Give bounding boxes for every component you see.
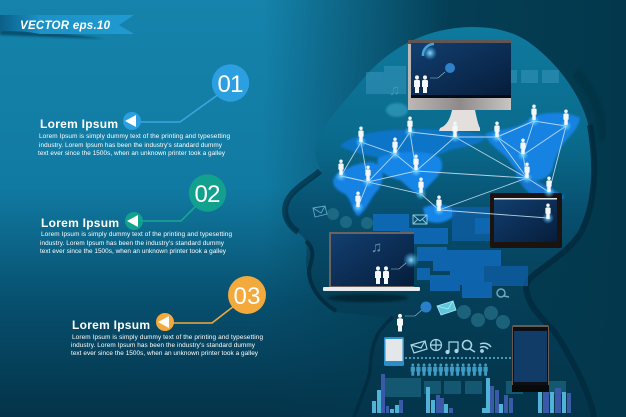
central landmass	[378, 152, 442, 194]
connector line 02	[142, 205, 197, 221]
network links	[341, 121, 566, 218]
node glows	[335, 115, 572, 224]
body text 01: industry. Lorem Ipsum has been the industry's standard dummy	[39, 142, 223, 149]
south-east landmass	[515, 172, 564, 203]
user with link and email	[397, 301, 456, 332]
people row	[411, 363, 488, 376]
step 02	[40, 174, 232, 255]
bar charts	[372, 374, 571, 413]
dotted divider	[405, 357, 511, 359]
glowing dot	[445, 63, 455, 73]
number badge 03	[228, 276, 266, 314]
body text 02: text ever since the 1500s, when an unknown printer took a galley	[40, 248, 227, 255]
hexagon cluster	[327, 208, 510, 329]
west landmass	[333, 162, 383, 216]
south island	[423, 205, 456, 223]
laptop	[323, 232, 420, 302]
right dark contour	[526, 125, 594, 417]
step 01	[38, 64, 249, 157]
world map	[333, 113, 580, 223]
icon row: mail, globe, music, search, wifi	[411, 340, 491, 354]
faint squares behind charts	[384, 378, 566, 397]
step 03	[71, 276, 266, 357]
network people	[335, 104, 572, 224]
monitor with users	[408, 40, 511, 131]
body text 01: text ever since the 1500s, when an unknown printer took a galley	[38, 150, 226, 157]
number badge 01	[212, 64, 249, 102]
chart light bars	[372, 378, 566, 413]
east landmass	[485, 113, 580, 180]
face dark contour	[285, 171, 320, 232]
chart dark bars	[381, 374, 571, 413]
heading 02: Lorem Ipsum	[41, 216, 119, 230]
search icon	[497, 289, 509, 297]
body text 03: Lorem Ipsum is simply dummy text of the printing and typesetting	[72, 334, 263, 341]
arrow marker 01	[123, 112, 141, 130]
number badge 01: 01	[218, 71, 244, 98]
body text 01	[38, 133, 230, 157]
body text 01: Lorem Ipsum is simply dummy text of the printing and typesetting	[39, 133, 230, 140]
north band	[340, 129, 487, 158]
glowing node	[403, 252, 419, 268]
connector line 03	[173, 306, 234, 323]
number badge 03: 03	[234, 283, 260, 310]
heading 03: Lorem Ipsum	[72, 318, 150, 332]
users on laptop	[375, 266, 389, 284]
connector line 01	[140, 94, 219, 122]
number badge 02	[189, 174, 226, 212]
body text 03: industry. Lorem Ipsum has been the industry's standard dummy	[71, 342, 256, 349]
ribbon banner: VECTOR eps.10	[0, 15, 134, 39]
translucent squares strip	[366, 66, 559, 94]
cloud glow	[386, 103, 408, 117]
body text 03	[71, 334, 263, 357]
head silhouette	[285, 27, 603, 417]
body text 03: text ever since the 1500s, when an unknown printer took a galley	[71, 350, 259, 357]
body text 02: Lorem Ipsum is simply dummy text of the printing and typesetting	[41, 231, 232, 238]
smartphone	[512, 325, 549, 392]
body text 02	[40, 231, 232, 255]
music note on laptop: ♫	[371, 239, 382, 256]
body text 02: industry. Lorem Ipsum has been the industry's standard dummy	[40, 240, 225, 247]
arrow marker 02	[125, 212, 143, 230]
small white tablet	[384, 337, 404, 366]
blue data rectangles	[373, 207, 528, 298]
email icon	[437, 301, 456, 315]
wifi icon on monitor	[423, 44, 437, 60]
faint music note: ♫	[389, 82, 400, 99]
ribbon banner: VECTOR eps.10: VECTOR eps.10	[20, 20, 111, 32]
envelope icons	[313, 206, 427, 224]
tablet	[490, 193, 562, 248]
heading 01: Lorem Ipsum	[40, 117, 118, 131]
users on monitor	[414, 75, 428, 93]
number badge 02: 02	[194, 181, 220, 208]
neck dark contour	[354, 317, 393, 417]
arrow marker 03	[156, 313, 174, 331]
